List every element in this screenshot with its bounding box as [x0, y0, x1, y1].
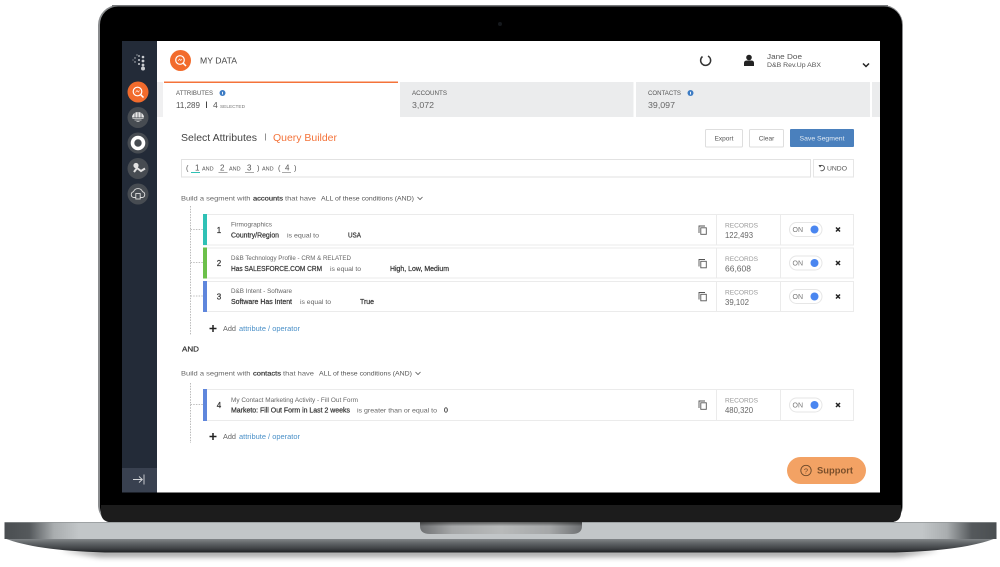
header: [170, 50, 869, 71]
heading: select attributes and query builder: [181, 132, 337, 144]
condition row 2: 66,608: [725, 264, 751, 274]
tab: attributes: [176, 90, 246, 110]
accounts segment intro: accounts: [253, 196, 284, 202]
laptop base: [4, 522, 996, 552]
base shadow: [60, 550, 940, 557]
condition row 4: 4: [217, 401, 222, 410]
icon: data active: [128, 82, 148, 102]
contacts segment intro: ALL of these conditions (AND): [319, 370, 412, 378]
accounts segment intro: that have: [285, 196, 316, 202]
add attribute link: contacts: Add: [223, 434, 236, 441]
button: clear: [750, 130, 784, 147]
contacts segment intro: Build a segment with: [181, 370, 251, 378]
condition row 2: Has SALESFORCE.COM CRM: [231, 266, 322, 273]
condition row 1: 1: [217, 226, 222, 235]
icon: ring: [128, 132, 148, 154]
condition row 1: [203, 214, 854, 245]
logo: [132, 54, 145, 70]
query expression input: ): [257, 164, 260, 172]
icon: my data: [170, 50, 191, 71]
contacts segment intro: [181, 370, 420, 378]
add attribute link: contacts: [210, 433, 301, 441]
support button: Support: [817, 466, 853, 476]
condition row 1: Country/Region: [231, 232, 279, 240]
tab: accounts: ACCOUNTS: [412, 91, 447, 97]
query expression input: (: [278, 164, 281, 172]
add attribute link: accounts: attribute / operator: [239, 326, 301, 333]
button: clear: Clear: [759, 136, 775, 142]
accounts segment intro: ALL of these conditions (AND): [321, 196, 414, 202]
icon: globe: [128, 107, 148, 128]
tab: attributes: 4: [213, 100, 218, 110]
button: export: [706, 130, 742, 147]
condition row 2: ON: [792, 260, 803, 268]
condition row 1: ON: [792, 227, 803, 234]
query expression input: 4: [285, 164, 290, 172]
heading: select attributes and query builder: Query Builder: [273, 132, 337, 144]
icon: user: [744, 55, 754, 66]
condition row 1: 122,493: [725, 231, 753, 240]
query expression input: 3: [247, 164, 252, 172]
query expression input: 2: [220, 164, 225, 172]
add attribute link: accounts: [210, 325, 301, 333]
condition row 4: 0: [444, 408, 448, 414]
accounts segment intro: Build a segment with: [181, 196, 251, 202]
button: undo: [814, 160, 854, 177]
button: undo: UNDO: [827, 166, 847, 172]
query expression input: AND: [229, 166, 241, 172]
query expression input: (: [186, 164, 189, 172]
condition row 1: RECORDS: [725, 222, 758, 230]
tab: attributes: ATTRIBUTES: [176, 91, 213, 97]
camera: [498, 22, 502, 26]
condition row 4: ON: [792, 402, 803, 410]
laptop lid: [98, 5, 903, 525]
tabs: [157, 82, 880, 117]
condition row 3: 3: [217, 292, 222, 302]
tab: contacts: 39,097: [648, 100, 675, 110]
condition row 3: D&B Intent - Software: [231, 289, 293, 295]
button: save segment: Save Segment: [800, 136, 845, 142]
tab: accounts: 3,072: [412, 100, 434, 110]
app screen: [122, 41, 880, 492]
query expression input: [182, 160, 810, 177]
sidebar: [122, 41, 157, 492]
user organization: D&B Rev.Up ABX: [767, 62, 822, 69]
user name: Jane Doe: [767, 52, 802, 61]
condition row 3: RECORDS: [725, 290, 758, 296]
tab: contacts: CONTACTS: [648, 91, 681, 97]
condition row 2: [203, 248, 854, 278]
condition row 1: is equal to: [287, 232, 319, 240]
condition row 4: [203, 389, 854, 421]
button: save segment: [790, 129, 854, 147]
condition row 2: D&B Technology Profile - CRM & RELATED: [231, 256, 352, 262]
button: export: Export: [715, 136, 734, 142]
icon: phone tools: [128, 158, 148, 179]
connector lines: contacts: [190, 383, 203, 443]
condition row 4: RECORDS: [725, 398, 758, 404]
condition row 4: My Contact Marketing Activity - Fill Out Form: [231, 398, 358, 404]
tab: contacts: [648, 90, 694, 110]
support button: ?: [804, 466, 808, 476]
condition row 3: ON: [792, 294, 803, 301]
condition row 3: Software Has Intent: [231, 299, 292, 306]
query expression input: AND: [262, 166, 274, 172]
condition row 3: [203, 281, 854, 312]
support button: [787, 457, 866, 484]
condition row 4: Marketo: Fill Out Form in Last 2 weeks: [231, 408, 350, 414]
accounts segment intro: [181, 196, 422, 202]
tab: attributes: SELECTED: [220, 104, 246, 110]
condition row 4: 480,320: [725, 406, 754, 415]
icon: cloud: [128, 184, 148, 204]
condition row 1: USA: [348, 232, 361, 240]
condition row 2: RECORDS: [725, 256, 758, 263]
page title: MY DATA: [200, 56, 237, 66]
add attribute link: accounts: Add: [223, 326, 236, 333]
and separator: AND: [182, 344, 200, 354]
condition row 3: True: [360, 299, 374, 306]
connector lines: accounts: [190, 206, 203, 335]
tab: accounts: [412, 91, 447, 110]
condition row 1: Firmographics: [231, 222, 272, 228]
icon: spinner: [701, 56, 711, 65]
condition row 3: 39,102: [725, 298, 749, 307]
condition row 2: is equal to: [330, 266, 361, 273]
contacts segment intro: that have: [283, 370, 314, 378]
contacts segment intro: contacts: [253, 370, 282, 378]
query expression input: 1: [195, 164, 200, 172]
icon: collapse arrow: [133, 474, 144, 484]
query expression input: AND: [202, 166, 214, 172]
condition row 3: is equal to: [300, 299, 331, 306]
condition row 2: High, Low, Medium: [390, 266, 449, 273]
query expression input: ): [294, 164, 297, 172]
add attribute link: contacts: attribute / operator: [239, 434, 301, 441]
icon: chevron: [863, 64, 869, 66]
heading: select attributes and query builder: Select Attributes: [181, 132, 257, 144]
condition row 2: 2: [217, 259, 222, 268]
condition row 4: is greater than or equal to: [357, 408, 437, 414]
tab: attributes: 11,289: [176, 100, 200, 110]
